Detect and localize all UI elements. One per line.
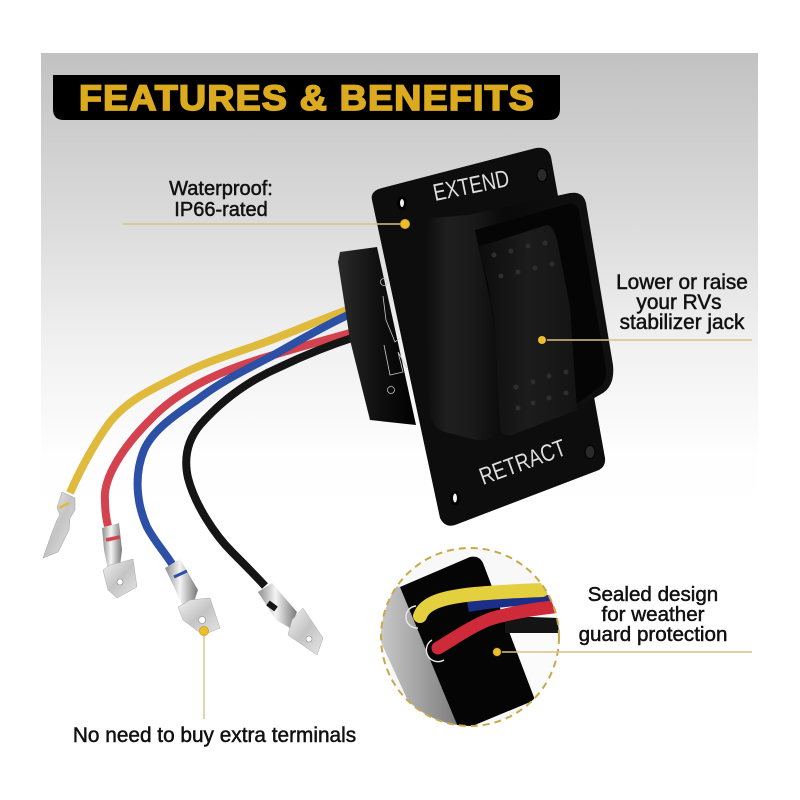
callout: sealed design: for weather [601, 603, 705, 626]
callout: sealed design: Sealed design [588, 583, 718, 606]
title: FEATURES & BENEFITS [79, 78, 534, 118]
callout: terminals [73, 626, 356, 747]
callout: waterproof: IP66-rated [174, 199, 268, 221]
callout: waterproof [123, 178, 410, 228]
plate label: extend: EXTEND [431, 165, 512, 207]
mounting plate [372, 148, 605, 526]
callout: terminals: No need to buy extra terminals [73, 724, 356, 747]
switch assembly with wires [43, 148, 613, 655]
callout: lower or raise: stabilizer jack [620, 311, 745, 334]
title banner [53, 75, 560, 120]
terminals [43, 492, 323, 655]
plate label: retract: RETRACT [476, 434, 570, 491]
callout: lower or raise: your RVs [636, 291, 722, 314]
callout: sealed design [492, 583, 752, 656]
inset: sealed rear detail [380, 547, 560, 727]
plate screw holes [398, 168, 595, 504]
rocker hood [424, 193, 613, 440]
rear housing [338, 247, 416, 425]
callout: lower or raise: Lower or raise [616, 271, 748, 294]
wires [70, 310, 355, 586]
callout: waterproof: Waterproof: [169, 178, 273, 200]
rocker dimples [492, 240, 568, 410]
rocker button [478, 225, 577, 435]
terminal holes and crimp bands [59, 503, 312, 642]
callout: lower or raise [538, 271, 752, 344]
rear circuit markings [380, 278, 407, 394]
callout: sealed design: guard protection [579, 623, 727, 646]
background panel [41, 53, 758, 750]
hood inner opening [475, 204, 606, 435]
